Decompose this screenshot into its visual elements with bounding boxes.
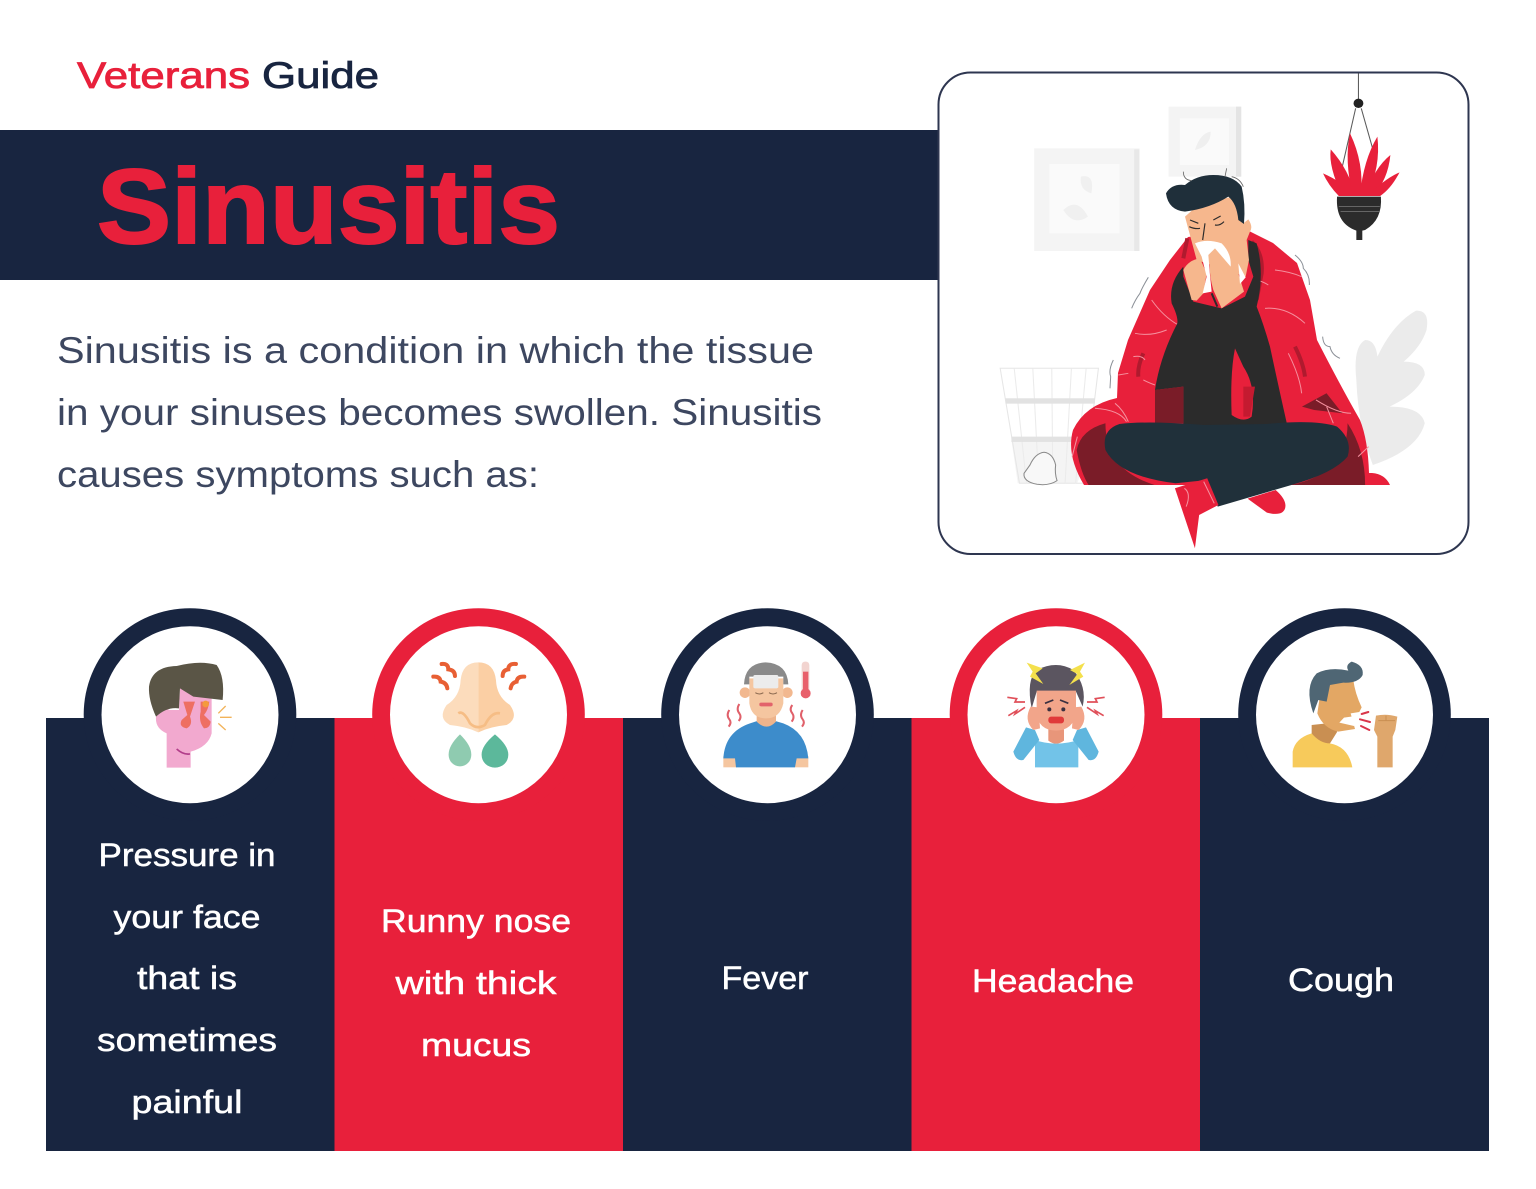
icon: face with sinus pressure (149, 663, 232, 768)
label: Pressure in (98, 837, 276, 873)
panel: pressure in your face (46, 608, 335, 1151)
icon: man with fever (723, 662, 811, 767)
panel: runny nose (334, 608, 624, 1151)
icon: runny nose (433, 662, 524, 768)
blanket slit (1231, 348, 1253, 420)
title: Sinusitis (97, 148, 560, 266)
dark red blanket patch (1155, 387, 1183, 423)
shiver marks (1110, 255, 1340, 388)
hands (1183, 254, 1244, 308)
tissue (1195, 241, 1246, 293)
panel: headache (912, 608, 1200, 1151)
panel: illustration card (938, 72, 1468, 554)
waste basket (1000, 368, 1098, 485)
label (97, 837, 277, 1120)
hanging plant (1323, 73, 1400, 240)
icon circle (968, 626, 1144, 803)
icon: man coughing (1293, 662, 1397, 767)
panel: cough (1200, 608, 1489, 1151)
intro paragraph: Sinusitis is a condition in which the tissue (57, 330, 814, 371)
icon circle (1256, 626, 1433, 803)
black sweater (1155, 240, 1288, 430)
title banner (0, 130, 940, 280)
logo: Veterans Guide (77, 55, 379, 96)
intro paragraph: in your sinuses becomes swollen. Sinusitis (57, 392, 822, 433)
legs and socks (1105, 422, 1349, 548)
icon circle (390, 626, 567, 803)
blanket folds and stripes (1115, 238, 1333, 423)
icon: man with headache (1007, 663, 1105, 767)
label (381, 903, 571, 1063)
panel: fever (623, 608, 912, 1151)
label: Fever (722, 960, 809, 996)
intro paragraph (57, 330, 822, 495)
label: Headache (972, 963, 1134, 999)
room background objects (1000, 73, 1427, 485)
picture frames (1034, 107, 1241, 251)
illustration: man with sinusitis in blanket (1000, 73, 1427, 548)
label: Cough (1288, 962, 1394, 998)
label: Runny nose (381, 903, 571, 939)
label: sometimes (97, 1022, 277, 1058)
blanket inner shadows (1077, 393, 1365, 485)
intro paragraph: causes symptoms such as: (57, 454, 539, 495)
icon circle (679, 626, 856, 803)
label: painful (132, 1084, 242, 1120)
head (1166, 168, 1251, 277)
icon circle (102, 626, 278, 803)
label: that is (137, 960, 237, 996)
lower blanket stripes (1072, 400, 1369, 457)
blanket (1071, 230, 1390, 485)
label: with thick (394, 965, 558, 1001)
gray leaf plant (1356, 311, 1427, 465)
label: mucus (421, 1027, 531, 1063)
label: your face (114, 899, 260, 935)
logo: Veterans Guide: Guide (262, 55, 379, 96)
upper body (1110, 168, 1340, 430)
logo: Veterans Guide: Veterans (77, 55, 250, 96)
